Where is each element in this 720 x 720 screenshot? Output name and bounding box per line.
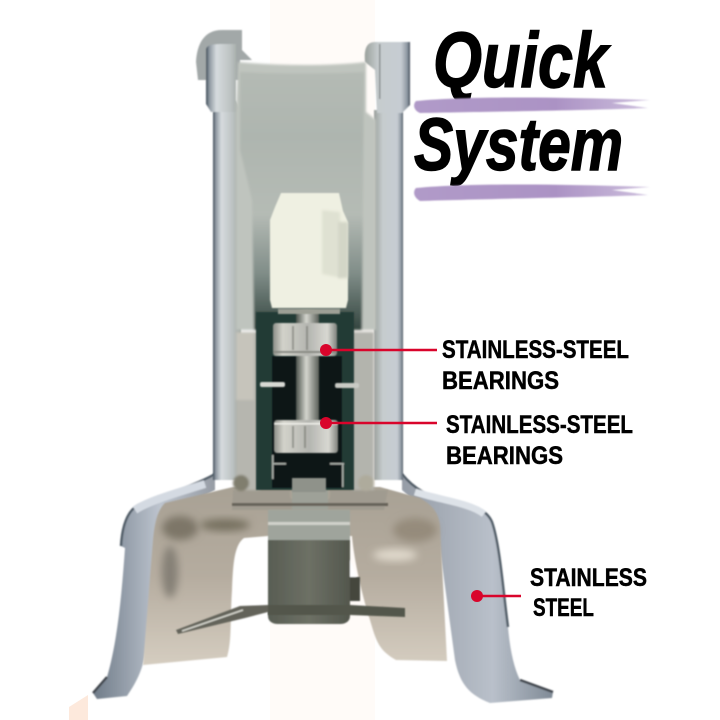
callout: lower bearing: STAINLESS-STEEL (446, 411, 633, 439)
blade (176, 605, 405, 634)
right leg (402, 474, 553, 703)
illustration: cutaway of the Quick System blade unit (93, 30, 553, 703)
brush stroke under System (414, 184, 650, 201)
lower bearing (274, 420, 338, 453)
title: System: System (414, 103, 623, 186)
callout: stainless steel leg (471, 564, 647, 622)
brush stroke under Quick (414, 98, 650, 113)
tube walls (196, 30, 410, 480)
callout: lower bearing (320, 411, 633, 470)
callout: stainless steel leg: STEEL (533, 594, 594, 622)
shield: inner tan sheet (143, 487, 447, 665)
tube interior (233, 62, 376, 491)
callout: stainless steel leg: STAINLESS (530, 564, 647, 592)
upper bearing (273, 323, 337, 356)
callout: lower bearing: BEARINGS (446, 442, 563, 470)
bearing chamber (256, 312, 354, 490)
callout: upper bearing: STAINLESS-STEEL (442, 336, 629, 364)
callout: upper bearing: BEARINGS (442, 367, 559, 395)
left leg (93, 474, 215, 699)
motor hub (268, 510, 360, 624)
base plate (232, 488, 388, 510)
shaft (296, 310, 319, 425)
white coupling block (270, 193, 348, 314)
pins (260, 382, 359, 388)
title: Quick: Quick (433, 16, 611, 104)
callout: upper bearing (320, 336, 629, 395)
